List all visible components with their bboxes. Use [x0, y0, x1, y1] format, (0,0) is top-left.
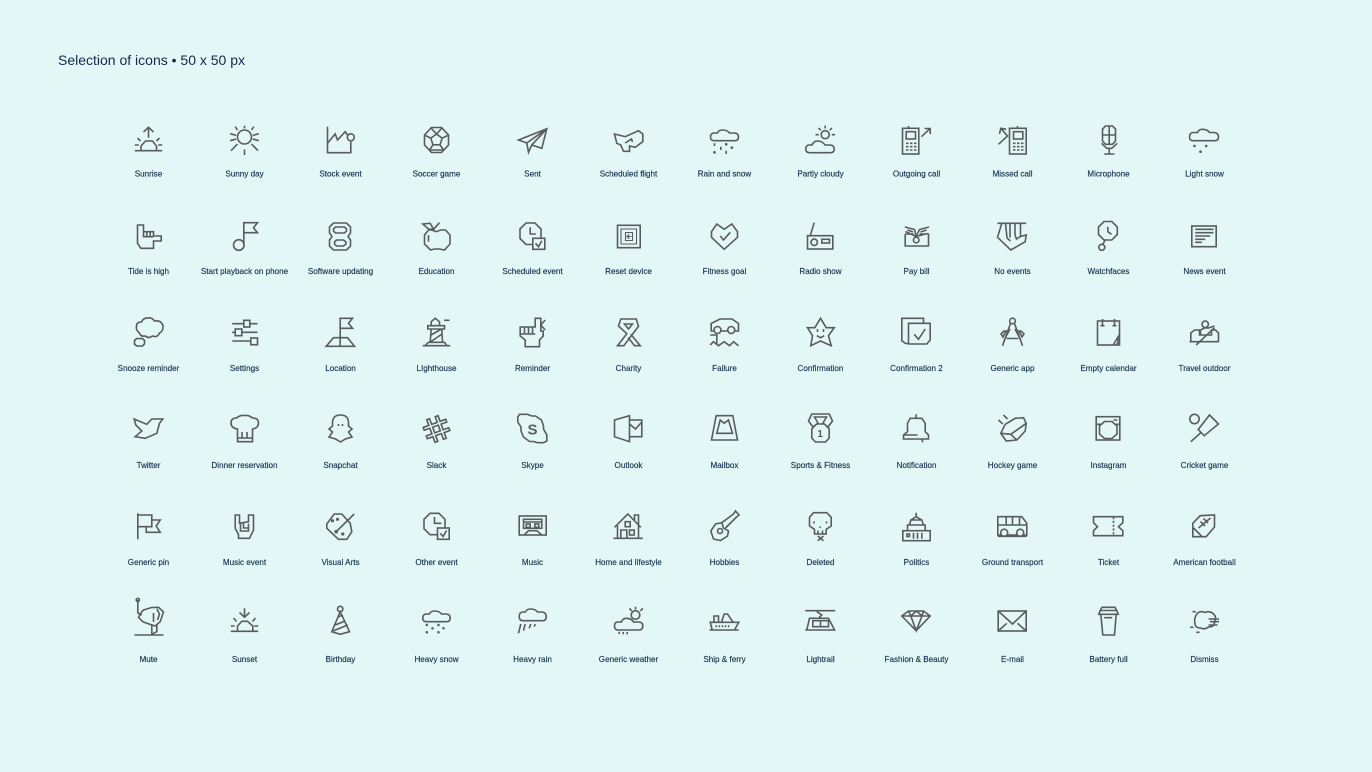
cell: Generic weather: [599, 607, 658, 664]
label: Battery full: [1089, 655, 1128, 664]
icon: news sheet: [1192, 226, 1216, 247]
label: Fitness goal: [703, 267, 747, 276]
icon: microphone: [1102, 126, 1117, 154]
label: Tide is high: [128, 267, 169, 276]
cell: Fashion & Beauty: [885, 611, 949, 664]
cell: Snapchat: [323, 415, 358, 470]
icon: cloud with heavy snow: [423, 611, 450, 634]
label: Politics: [904, 558, 929, 567]
label: Twitter: [137, 461, 161, 470]
cell: Instagram: [1090, 417, 1127, 470]
icon: cloud with light snow: [1190, 129, 1218, 153]
cell: Soccer game: [413, 128, 461, 179]
cell: Missed call: [992, 126, 1033, 179]
icon: sunset: [231, 608, 258, 631]
cell: Heavy rain: [513, 609, 552, 664]
label: Dismiss: [1190, 655, 1219, 664]
cell: Start playback on phone: [201, 223, 289, 276]
label: Empty calendar: [1080, 364, 1137, 373]
icon: thought bubble: [134, 318, 163, 346]
cell: Snooze reminder: [118, 318, 180, 373]
label: Dinner reservation: [211, 461, 278, 470]
icon: mailbox tray: [712, 416, 738, 440]
label: Slack: [427, 461, 447, 470]
icon: stock chart: [328, 127, 354, 153]
cell: Politics: [903, 513, 930, 567]
cell: Partly cloudy: [797, 126, 845, 179]
label: Pay bill: [903, 267, 930, 276]
icon: smiling star: [808, 318, 834, 346]
cell: Notification: [896, 414, 937, 470]
label: Travel outdoor: [1179, 364, 1231, 373]
cell: Sunny day: [225, 126, 265, 179]
label: News event: [1183, 267, 1226, 276]
cell: Stock event: [319, 127, 362, 179]
cell: Outgoing call: [893, 126, 940, 179]
label: Sent: [524, 170, 542, 179]
cell: Charity: [616, 319, 642, 373]
cell: Battery full: [1089, 607, 1128, 664]
icon: hand hanging on bar: [998, 223, 1026, 250]
icon: ostrich: [134, 598, 164, 635]
icon: puck: [998, 415, 1026, 441]
label: Failure: [712, 364, 737, 373]
icon: apple: [423, 223, 450, 250]
icon: shaka hand: [138, 225, 161, 248]
icon: capitol: [903, 513, 930, 541]
label: Snapchat: [323, 461, 358, 470]
label: Cricket game: [1181, 461, 1229, 470]
label: Settings: [230, 364, 259, 373]
icon: gust cloud: [1190, 612, 1219, 632]
label: Ship & ferry: [703, 655, 747, 664]
label: Microphone: [1087, 170, 1130, 179]
label: Home and lifestyle: [595, 558, 662, 567]
label: Sunrise: [135, 170, 163, 179]
cell: Fitness goal: [703, 224, 747, 276]
icon: bell: [904, 414, 928, 442]
icon: car over cliff: [710, 319, 738, 346]
cell: Location: [325, 318, 356, 373]
icon: clock and checkbox: [520, 223, 545, 249]
icon: calendar: [1098, 319, 1120, 345]
cell: Birthday: [326, 606, 356, 664]
cell: Radio show: [799, 223, 842, 276]
label: Snooze reminder: [118, 364, 180, 373]
label: Birthday: [326, 655, 356, 664]
label: Sunny day: [225, 170, 265, 179]
label: Confirmation: [798, 364, 843, 373]
cell: Reset device: [605, 225, 652, 276]
icon: sliders: [232, 320, 258, 345]
icon: cassette: [519, 516, 546, 535]
label: Soccer game: [413, 170, 461, 179]
cell: Sent: [518, 129, 547, 179]
cell: Ticket: [1094, 517, 1123, 567]
cell: Generic pin: [128, 513, 169, 567]
cell: Heavy snow: [414, 611, 459, 664]
icon: ticket: [1094, 517, 1123, 536]
cell: Visual Arts: [321, 514, 360, 567]
label: Light snow: [1185, 170, 1224, 179]
icon: plane: [614, 131, 643, 151]
cell: Lighthouse: [416, 318, 457, 373]
cell: Dinner reservation: [211, 415, 278, 470]
label: Partly cloudy: [797, 170, 845, 179]
label: Scheduled event: [502, 267, 563, 276]
icon: palette: [327, 514, 354, 539]
icon: tram: [805, 611, 835, 630]
icon: ribbon: [618, 319, 640, 346]
label: Instagram: [1090, 461, 1127, 470]
label: Ground transport: [982, 558, 1044, 567]
icon: hash: [421, 414, 452, 444]
cell: Travel outdoor: [1179, 321, 1231, 373]
icon: ghost: [329, 415, 352, 442]
icon: sun: [230, 126, 259, 155]
cell: Hockey game: [988, 415, 1038, 470]
label: Generic pin: [128, 558, 169, 567]
icon: heart check: [712, 224, 738, 249]
icon: soccer ball: [424, 128, 448, 152]
icon: clock and checkbox: [424, 513, 449, 539]
icon: cloud with rain and snow: [710, 130, 738, 154]
icon: guitar: [711, 511, 739, 540]
cell: Microphone: [1087, 126, 1130, 179]
icon: football: [1193, 515, 1214, 537]
label: Hobbies: [710, 558, 739, 567]
cell: Skype: [518, 414, 547, 470]
cell: Slack: [421, 414, 452, 470]
label: Software updating: [308, 267, 373, 276]
label: Confirmation 2: [890, 364, 943, 373]
cell: Home and lifestyle: [595, 514, 662, 567]
cell: Tide is high: [128, 225, 169, 276]
cell: Hobbies: [710, 511, 739, 567]
icon: skull: [810, 513, 831, 541]
label: Location: [325, 364, 356, 373]
cell: Mailbox: [711, 416, 738, 470]
label: E-mail: [1001, 655, 1024, 664]
icon: camera square: [1096, 417, 1120, 440]
cell: Other event: [415, 513, 458, 567]
icon: rock hand: [235, 515, 254, 538]
icon: chef hat: [231, 415, 258, 442]
icon: pendant watch: [1098, 222, 1117, 250]
cell: Music: [519, 516, 546, 567]
icon: winged bill: [905, 227, 929, 246]
cell: Failure: [710, 319, 738, 373]
icon: sun cloud and drizzle: [614, 607, 643, 634]
cell: Ship & ferry: [703, 614, 747, 664]
label: Ticket: [1098, 558, 1120, 567]
label: Sports & Fitness: [791, 461, 850, 470]
label: Scheduled flight: [600, 170, 658, 179]
label: Reset device: [605, 267, 652, 276]
icon: figure eight: [330, 223, 350, 250]
cell: Sunrise: [135, 127, 163, 179]
cell: Light snow: [1185, 129, 1224, 179]
icon: bat and ball: [1190, 414, 1218, 442]
cell: Generic app: [990, 318, 1035, 373]
cell: Dismiss: [1190, 612, 1219, 664]
icon: sun and cloud: [806, 126, 835, 153]
icon: stacked sheets with check: [902, 318, 930, 344]
cell: Sports & Fitness: [791, 414, 850, 470]
icon: envelope: [998, 611, 1026, 631]
icon: bus: [998, 517, 1027, 536]
cell: Ground transport: [982, 517, 1044, 567]
icon: pin flag: [138, 513, 160, 539]
label: Music event: [223, 558, 267, 567]
cell: Pay bill: [903, 227, 930, 276]
icon: person in canoe: [1190, 321, 1219, 345]
cell: Empty calendar: [1080, 319, 1137, 373]
cell: Outlook: [614, 416, 643, 470]
cell: Sunset: [231, 608, 258, 664]
label: Radio show: [799, 267, 842, 276]
label: Generic weather: [599, 655, 658, 664]
label: Reminder: [515, 364, 550, 373]
label: No events: [994, 267, 1031, 276]
label: LIghthouse: [416, 364, 457, 373]
icon: fist with tied finger: [520, 318, 545, 347]
icon: cloud with rain: [518, 609, 546, 633]
title: Selection of icons • 50 x 50 px: [58, 52, 245, 68]
label: Mailbox: [711, 461, 738, 470]
icon: phone with outgoing arrow: [902, 126, 930, 154]
label: Charity: [616, 364, 642, 373]
label: Lightrail: [806, 655, 835, 664]
cell: Watchfaces: [1088, 222, 1129, 276]
cell: No events: [994, 223, 1031, 276]
cell: Software updating: [308, 223, 373, 276]
label: Notification: [896, 461, 937, 470]
cell: Reminder: [515, 318, 550, 373]
icon: radio: [808, 223, 833, 249]
icon: house: [614, 514, 643, 538]
icon: music note flag: [234, 223, 258, 250]
cell: Lightrail: [805, 611, 835, 664]
icon: party hat: [332, 606, 350, 634]
cell: American football: [1173, 515, 1236, 567]
label: Start playback on phone: [201, 267, 289, 276]
icon: skype logo: S: [527, 422, 538, 438]
label: Rain and snow: [698, 170, 751, 179]
cell: Mute: [134, 598, 164, 664]
label: Visual Arts: [321, 558, 360, 567]
label: Skype: [521, 461, 544, 470]
cell: Confirmation 2: [890, 318, 943, 373]
icon: coffee cup: [1099, 607, 1118, 635]
icon: drafting compass: [1001, 318, 1024, 346]
label: Outgoing call: [893, 170, 940, 179]
label: Hockey game: [988, 461, 1038, 470]
label: Music: [522, 558, 543, 567]
icon: bird: [134, 419, 163, 438]
cell: Cricket game: [1181, 414, 1229, 470]
cell: E-mail: [998, 611, 1026, 664]
label: Outlook: [615, 461, 643, 470]
label: Heavy snow: [414, 655, 459, 664]
label: Fashion & Beauty: [885, 655, 949, 664]
icon: diamond: [902, 611, 930, 631]
cell: News event: [1183, 226, 1226, 276]
cell: Scheduled event: [502, 223, 563, 276]
icon: medal: 1: [817, 429, 823, 440]
cell: Music event: [223, 515, 267, 567]
cell: Rain and snow: [698, 130, 751, 179]
cell: Deleted: [807, 513, 834, 567]
icon: paper plane: [518, 129, 547, 152]
cell: Scheduled flight: [600, 131, 658, 179]
cell: Settings: [230, 320, 259, 373]
cell: Confirmation: [798, 318, 843, 373]
label: American football: [1173, 558, 1236, 567]
icon: flag on mound: [326, 318, 354, 346]
label: Heavy rain: [513, 655, 552, 664]
label: Education: [418, 267, 454, 276]
label: Other event: [415, 558, 458, 567]
icon: lighthouse: [423, 318, 450, 346]
cell: Education: [418, 223, 454, 276]
label: Deleted: [807, 558, 834, 567]
icon: sunrise: [135, 127, 162, 151]
label: Missed call: [992, 170, 1033, 179]
label: Mute: [140, 655, 158, 664]
icon: phone with missed arrow: [998, 126, 1026, 154]
label: Watchfaces: [1088, 267, 1129, 276]
icon: outlook logo: [614, 416, 642, 442]
label: Generic app: [990, 364, 1035, 373]
icon: ship: [710, 614, 739, 630]
icon: framed back arrow: [618, 225, 640, 248]
label: Stock event: [319, 170, 362, 179]
cell: Twitter: [134, 419, 163, 470]
label: Sunset: [232, 655, 258, 664]
